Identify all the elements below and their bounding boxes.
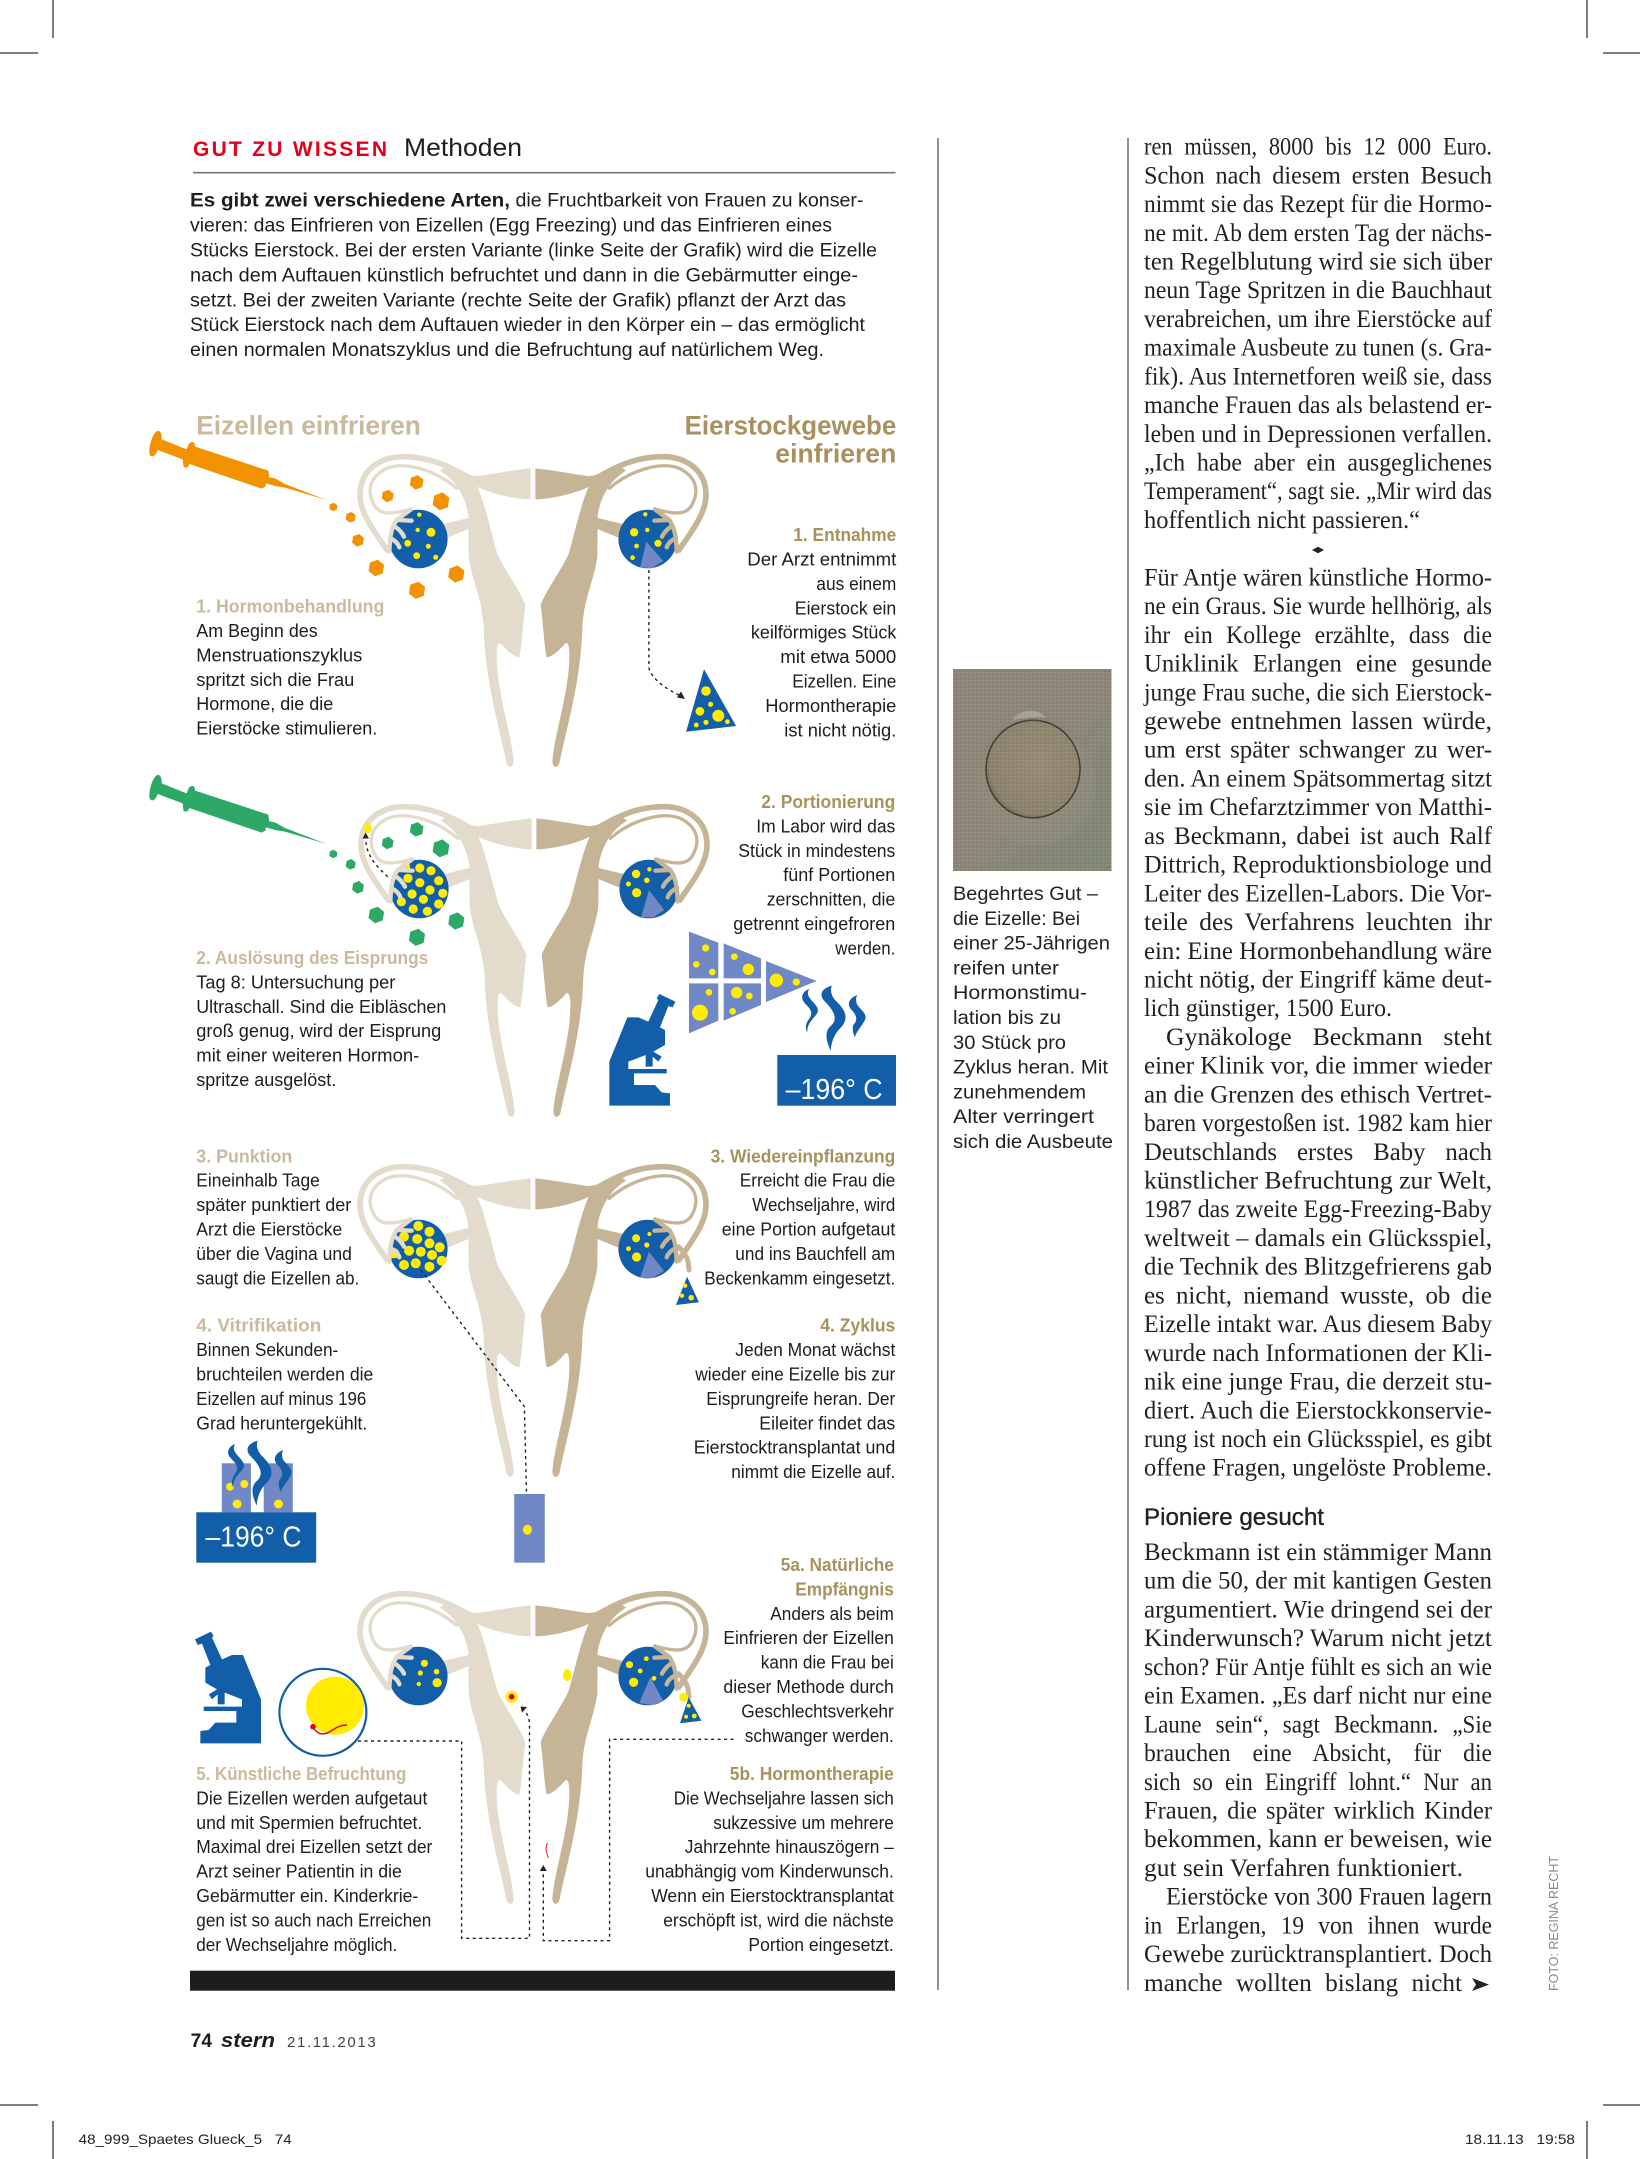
step text: 1. Hormonbehandlung: Hormone, die die xyxy=(196,694,333,714)
article column: third part: bekommen, kann er beweisen, wie xyxy=(1144,1826,1492,1853)
article column: second part: ein: Eine Hormonbehandlung wäre xyxy=(1144,938,1492,965)
step text: 2. Auslösung des Eisprungs: 2. Auslösung des Eisprungs xyxy=(196,948,428,968)
page footer: 74 xyxy=(191,2031,212,2052)
photo caption: 30 Stück pro xyxy=(953,1033,1066,1054)
vitrification straw xyxy=(514,1494,545,1563)
uterus left half xyxy=(360,457,531,767)
article column: second part: nicht nötig, der Eingriff käme deut- xyxy=(1144,966,1492,994)
article column: third part: manche wollten bislang nicht xyxy=(1144,1970,1462,1997)
step text: 2. Portionierung: getrennt eingefroren xyxy=(733,914,895,934)
intro text: setzt. Bei der zweiten Variante (rechte Seite der Grafik) pflanzt der Arzt das xyxy=(190,290,846,311)
article column: second part: die Technik des Blitzgefrierens gab xyxy=(1144,1254,1492,1281)
step text: 5b. Hormontherapie: 5b. Hormontherapie xyxy=(730,1764,894,1784)
step text: 3. Wiedereinpflanzung xyxy=(704,1146,895,1288)
dotted path: hormone therapy xyxy=(540,1739,734,1941)
article column: second part: gewebe entnehmen lassen würde, xyxy=(1144,708,1492,735)
article column: first part: Temperament“, sagt sie. „Mir wird das xyxy=(1144,478,1492,505)
step text: 1. Hormonbehandlung: Menstruationszyklus xyxy=(196,645,362,665)
step text: 2. Auslösung des Eisprungs: Tag 8: Untersuchung per xyxy=(196,972,395,992)
tissue portions cut into five xyxy=(689,932,817,1033)
step text: 5a. Natürliche Empfängnis xyxy=(723,1555,894,1746)
article column: second part: es nicht, niemand wusste, ob die xyxy=(1144,1282,1492,1309)
article column: third part: in Erlangen, 19 von ihnen wurde xyxy=(1144,1912,1492,1939)
step text: 3. Punktion: saugt die Eizellen ab. xyxy=(196,1268,359,1288)
article column: first part: manche Frauen das als belastend er- xyxy=(1144,392,1492,419)
step text: 4. Vitrifikation: 4. Vitrifikation xyxy=(196,1316,321,1336)
article column: first part xyxy=(1144,134,1493,534)
photo caption: Alter verringert xyxy=(953,1107,1095,1128)
step text: 3. Punktion: 3. Punktion xyxy=(196,1146,292,1166)
photo caption: die Eizelle: Bei xyxy=(953,909,1080,930)
step text: 3. Punktion xyxy=(196,1146,359,1288)
article column: first part: „Ich habe aber ein ausgeglichenes xyxy=(1144,450,1492,476)
step text: 5b. Hormontherapie: Die Wechseljahre lassen sich xyxy=(674,1788,894,1808)
uterus right half xyxy=(535,1594,706,1904)
magnified egg with sperm xyxy=(279,1669,366,1756)
intro text xyxy=(190,191,877,361)
column rules xyxy=(938,138,1128,1990)
step text: 1. Entnahme: Der Arzt entnimmt xyxy=(747,550,896,570)
uterus left half with puncture xyxy=(360,1167,531,1477)
step text: 5b. Hormontherapie xyxy=(645,1764,894,1955)
step text: 5b. Hormontherapie: sukzessive um mehrere xyxy=(713,1813,894,1833)
freezing icon left: –196° C xyxy=(206,1522,302,1554)
title: Methoden: Methoden xyxy=(404,134,522,162)
article column: first part: maximale Ausbeute zu tunen (s. Gra- xyxy=(1144,335,1492,362)
step text: 4. Vitrifikation: bruchteilen werden die xyxy=(196,1364,373,1384)
article column: second part: sie im Chefarztzimmer von Matthi- xyxy=(1144,794,1492,821)
step text: 2. Portionierung: fünf Portionen xyxy=(783,865,895,885)
article column: third part xyxy=(1144,1539,1493,1997)
step text: 5. Künstliche Befruchtung: und mit Spermien befruchtet. xyxy=(196,1813,422,1833)
step text: 1. Hormonbehandlung xyxy=(196,596,384,739)
photo caption: zunehmendem xyxy=(953,1082,1086,1103)
photo caption: sich die Ausbeute xyxy=(953,1132,1113,1153)
green hormone particles xyxy=(329,822,464,946)
step text: 5a. Natürliche Empfängnis: Anders als beim xyxy=(770,1604,894,1624)
step text: 4. Vitrifikation: Binnen Sekunden- xyxy=(196,1340,338,1360)
uterus left half xyxy=(360,1594,531,1904)
row 4 illustration xyxy=(195,1594,734,1941)
step text: 5a. Natürliche Empfängnis: Einfrieren der Eizellen xyxy=(723,1628,894,1648)
step text: 1. Entnahme: Eizellen. Eine xyxy=(792,672,896,692)
step text: 5. Künstliche Befruchtung xyxy=(196,1764,432,1955)
tissue wedge xyxy=(686,669,736,732)
step text: 4. Vitrifikation: Eizellen auf minus 196 xyxy=(196,1389,366,1409)
step text: 4. Zyklus: Eisprungreife heran. Der xyxy=(706,1389,895,1409)
step text: 1. Entnahme: keilförmiges Stück xyxy=(751,623,897,643)
step text: 4. Zyklus: wieder eine Eizelle bis zur xyxy=(694,1364,895,1384)
step text: 4. Zyklus xyxy=(694,1316,895,1482)
continuation arrow xyxy=(1472,1978,1489,1991)
step text: 2. Auslösung des Eisprungs: mit einer weiteren Hormon- xyxy=(196,1046,419,1066)
step text: 5b. Hormontherapie: Wenn ein Eierstocktransplantat xyxy=(651,1886,894,1906)
step text: 2. Auslösung des Eisprungs: groß genug, wird der Eisprung xyxy=(196,1021,441,1041)
uterus right half xyxy=(536,807,707,1117)
article column: second part: teile des Verfahrens leuchten ihr xyxy=(1144,909,1493,936)
step text: 3. Wiedereinpflanzung: Erreicht die Frau die xyxy=(740,1171,895,1191)
step text: 1. Entnahme: ist nicht nötig. xyxy=(784,720,896,740)
article column: second part: diert. Auch die Eierstockkonservie- xyxy=(1144,1397,1492,1424)
page footer: stern xyxy=(221,2030,275,2052)
step text: 2. Portionierung xyxy=(733,792,895,958)
article column: second part: Für Antje wären künstliche Hormo- xyxy=(1144,564,1492,591)
article column: first part: nimmt sie das Rezept für die Hormo- xyxy=(1144,191,1492,218)
step text: 4. Vitrifikation: Grad heruntergekühlt. xyxy=(196,1413,367,1433)
intro text: Es gibt zwei verschiedene Arten, xyxy=(190,191,510,212)
article column: third part: brauchen eine Absicht, für die xyxy=(1144,1740,1492,1767)
photo caption: Zyklus heran. Mit xyxy=(953,1058,1109,1079)
step text: 5b. Hormontherapie: unabhängig vom Kinderwunsch. xyxy=(645,1862,894,1882)
article column: third part: Eierstöcke von 300 Frauen lagern xyxy=(1166,1884,1492,1911)
article column: second part: Deutschlands erstes Baby nach xyxy=(1144,1139,1492,1166)
step text: 3. Wiedereinpflanzung: Wechseljahre, wird xyxy=(752,1195,895,1215)
step text: 2. Portionierung: Stück in mindestens xyxy=(738,841,895,861)
step text: 5b. Hormontherapie: Portion eingesetzt. xyxy=(748,1935,894,1955)
icon: microscope xyxy=(609,994,675,1106)
freezing icon left xyxy=(196,1441,316,1563)
photo caption: einer 25-Jährigen xyxy=(953,934,1110,955)
article column: second part: ihr ein Kollege erzählte, dass die xyxy=(1144,622,1492,649)
step text: 4. Zyklus: Eileiter findet das xyxy=(759,1413,895,1433)
icon: orange syringe xyxy=(149,431,327,500)
article column: first part: neun Tage Spritzen in die Bauchhaut xyxy=(1144,277,1492,304)
step text: 2. Portionierung: werden. xyxy=(834,938,895,958)
article column: third part: Beckmann ist ein stämmiger Mann xyxy=(1144,1539,1492,1566)
photo caption: lation bis zu xyxy=(953,1008,1061,1029)
article column: third part: ein Examen. „Es darf nicht nur eine xyxy=(1144,1683,1492,1710)
article column: second part: Uniklinik Erlangen eine gesunde xyxy=(1144,651,1492,678)
section header xyxy=(193,134,522,162)
step text: 3. Punktion: Eineinhalb Tage xyxy=(196,1171,320,1191)
black footer bar xyxy=(190,1971,895,1991)
article column: first part: ne mit. Ab dem ersten Tag der nächs- xyxy=(1144,220,1492,247)
step text: 2. Auslösung des Eisprungs: spritze ausgelöst. xyxy=(196,1070,336,1090)
photo caption: reifen unter xyxy=(953,958,1060,979)
heading: Eierstockgewebe einfrieren: einfrieren xyxy=(775,439,896,469)
step text: 1. Hormonbehandlung: 1. Hormonbehandlung xyxy=(196,596,384,616)
heading: Eierstockgewebe einfrieren xyxy=(685,410,896,469)
photo: egg cell xyxy=(953,669,1112,871)
article column: first part: verabreichen, um ihre Eierstöcke auf xyxy=(1144,306,1493,333)
article column: second part: nik eine junge Frau, die derzeit stu- xyxy=(1144,1369,1492,1396)
article column: third part: gut sein Verfahren funktioniert. xyxy=(1144,1855,1463,1882)
intro text: Stück Eierstock nach dem Auftauen wieder in den Körper ein – das ermöglicht xyxy=(190,315,866,336)
icon: microscope mirrored xyxy=(195,1632,261,1743)
step text: 5a. Natürliche Empfängnis: Empfängnis xyxy=(795,1579,894,1599)
article column: second part: den. An einem Spätsommertag sitzt xyxy=(1144,765,1492,792)
article column: second part: lich günstiger, 1500 Euro. xyxy=(1144,995,1392,1022)
step text: 5. Künstliche Befruchtung: 5. Künstliche Befruchtung xyxy=(196,1764,406,1784)
step text: 2. Auslösung des Eisprungs xyxy=(196,948,446,1090)
article column: second part: einer Klinik vor, die immer wieder xyxy=(1144,1053,1493,1080)
step text: 2. Portionierung: 2. Portionierung xyxy=(761,792,895,812)
eggs and sperm in tract xyxy=(506,1669,688,1858)
article column: second part xyxy=(1143,564,1493,1482)
section divider ornament xyxy=(1312,547,1324,553)
step text: 5b. Hormontherapie: erschöpft ist, wird die nächste xyxy=(663,1910,894,1930)
uterus right half xyxy=(535,457,706,767)
row 2 illustration xyxy=(149,775,896,1117)
step text: 1. Hormonbehandlung: spritzt sich die Frau xyxy=(196,670,354,690)
article column: second part: um erst später schwanger zu wer- xyxy=(1144,737,1492,764)
step text: 4. Vitrifikation xyxy=(196,1316,373,1433)
article column: second part: an die Grenzen des ethisch Vertret- xyxy=(1144,1081,1492,1108)
step text: 3. Punktion: später punktiert der xyxy=(196,1195,351,1215)
article column: second part: junge Frau suche, die sich Eierstock- xyxy=(1143,679,1492,706)
uterus right half with reimplanted tissue xyxy=(535,1167,706,1477)
photo caption: Begehrtes Gut – xyxy=(953,884,1098,905)
step text: 5b. Hormontherapie: Jahrzehnte hinauszögern – xyxy=(685,1837,894,1857)
step text: 3. Punktion: Arzt die Eierstöcke xyxy=(196,1220,342,1240)
photo caption xyxy=(953,884,1113,1153)
article column: second part: Gynäkologe Beckmann steht xyxy=(1166,1024,1492,1051)
icon: green syringe xyxy=(149,775,327,844)
step text: 2. Portionierung: Im Labor wird das xyxy=(756,816,895,836)
dotted arrow: ovulation xyxy=(362,832,388,877)
step text: 3. Wiedereinpflanzung: Beckenkamm eingesetzt. xyxy=(704,1268,895,1288)
row 1 illustration xyxy=(149,431,736,767)
article column: second part: Leiter des Eizellen-Labors. Die Vor- xyxy=(1144,880,1492,907)
article column: third part: schon? Für Antje fühlt es sich an wie xyxy=(1144,1654,1492,1681)
article column: third part: sich so ein Eingriff lohnt.“ Nur an xyxy=(1144,1769,1492,1796)
orange hormone particles xyxy=(329,475,464,599)
intro text: nach dem Auftauen künstlich befruchtet und dann in die Gebärmutter einge- xyxy=(190,265,858,286)
article column: third part: Frauen, die später wirklich Kinder xyxy=(1144,1798,1493,1824)
page footer: 21.11.2013 xyxy=(287,2034,376,2051)
heading: Eierstockgewebe einfrieren: Eierstockgewebe xyxy=(685,410,896,440)
article column: second part: Dittrich, Reproduktionsbiologe und xyxy=(1144,852,1492,879)
article column: first part: ren müssen, 8000 bis 12 000 Euro. xyxy=(1144,134,1492,161)
article column: second part: Eizelle intakt war. Aus diesem Baby xyxy=(1144,1311,1492,1338)
photo credit: FOTO: REGINA RECHT xyxy=(1546,1856,1561,1991)
step text: 5a. Natürliche Empfängnis: kann die Frau bei xyxy=(761,1653,894,1673)
step text: 3. Wiedereinpflanzung: und ins Bauchfell am xyxy=(735,1244,895,1264)
step text: 5a. Natürliche Empfängnis: dieser Methode durch xyxy=(723,1677,894,1697)
dotted path: artificial fertilisation xyxy=(358,1706,530,1938)
article column: third part: argumentiert. Wie dringend sei der xyxy=(1144,1596,1493,1623)
step text: 2. Portionierung: zerschnitten, die xyxy=(767,890,895,910)
step text: 1. Entnahme: 1. Entnahme xyxy=(793,525,896,545)
step text: 5. Künstliche Befruchtung: gen ist so auch nach Erreichen xyxy=(196,1910,431,1930)
step text: 5a. Natürliche Empfängnis: Geschlechtsverkehr xyxy=(741,1701,894,1721)
step text: 4. Zyklus: nimmt die Eizelle auf. xyxy=(731,1462,895,1482)
article column: second part: baren vorgestoßen ist. 1982 kam hier xyxy=(1144,1110,1493,1137)
step text: 5. Künstliche Befruchtung: Gebärmutter ein. Kinderkrie- xyxy=(196,1886,418,1906)
step text: 3. Wiedereinpflanzung: eine Portion aufgetaut xyxy=(722,1220,895,1240)
article column: second part: weltweit – damals ein Glücksspiel, xyxy=(1144,1225,1492,1252)
article column: second part: offene Fragen, ungelöste Probleme. xyxy=(1144,1455,1492,1482)
article column: second part: ne ein Graus. Sie wurde hellhörig, als xyxy=(1144,593,1492,620)
article column: third part: Laune sein“, sagt Beckmann. „Sie xyxy=(1144,1711,1492,1738)
step text: 4. Zyklus: 4. Zyklus xyxy=(820,1316,895,1336)
subheading: Pioniere gesucht: Pioniere gesucht xyxy=(1144,1504,1324,1531)
intro text: Stücks Eierstock. Bei der ersten Variante (linke Seite der Grafik) wird die Eizelle xyxy=(190,240,877,262)
article column: second part: wurde nach Informationen der Kli- xyxy=(1144,1340,1492,1367)
freezer box -196 C: –196° C xyxy=(786,1074,883,1106)
step text: 4. Zyklus: Jeden Monat wächst xyxy=(735,1340,895,1360)
step text: 5. Künstliche Befruchtung: Die Eizellen werden aufgetaut xyxy=(196,1788,427,1808)
step text: 1. Hormonbehandlung: Eierstöcke stimulieren. xyxy=(196,719,377,739)
step text: 3. Punktion: über die Vagina und xyxy=(196,1244,352,1264)
article column: second part: künstlicher Befruchtung zur Welt, xyxy=(1144,1168,1492,1194)
step text: 3. Wiedereinpflanzung: 3. Wiedereinpflanzung xyxy=(711,1146,895,1166)
step text: 4. Zyklus: Eierstocktransplantat und xyxy=(694,1438,895,1458)
step text: 5. Künstliche Befruchtung: der Wechseljahre möglich. xyxy=(196,1935,397,1955)
step text: 5. Künstliche Befruchtung: Maximal drei Eizellen setzt der xyxy=(196,1837,432,1857)
step text: 1. Entnahme: mit etwa 5000 xyxy=(780,647,896,667)
step text: 1. Entnahme xyxy=(747,525,897,740)
kicker: Gut zu wissen: GUT ZU WISSEN xyxy=(193,138,387,161)
small tissue wedge at pelvic crest xyxy=(676,1277,699,1305)
step text: 1. Entnahme: Hormontherapie xyxy=(765,696,896,716)
article column: first part: hoffentlich nicht passieren.“ xyxy=(1144,507,1420,534)
article column: second part: rung ist noch ein Glücksspiel, es gibt xyxy=(1144,1426,1492,1453)
icon: cold vapour xyxy=(802,986,866,1051)
intro text: vieren: das Einfrieren von Eizellen (Egg Freezing) und das Einfrieren eines xyxy=(190,216,832,237)
article column: third part: um die 50, der mit kantigen Gesten xyxy=(1144,1568,1492,1595)
dotted arrow to straw xyxy=(421,1270,530,1520)
dotted arrow to tissue wedge xyxy=(649,570,685,699)
step text: 1. Entnahme: aus einem xyxy=(816,574,896,594)
step text: 5. Künstliche Befruchtung: Arzt seiner Patientin in die xyxy=(196,1862,402,1882)
heading: Eizellen einfrieren: Eizellen einfrieren xyxy=(196,410,421,440)
intro text: die Fruchtbarkeit von Frauen zu konser- xyxy=(516,191,864,212)
step text: 1. Entnahme: Eierstock ein xyxy=(795,598,896,618)
article column: first part: Schon nach diesem ersten Besuch xyxy=(1144,162,1492,189)
article column: third part: Kinderwunsch? Warum nicht jetzt xyxy=(1144,1625,1492,1652)
printer slug left: 48_999_Spaetes Glueck_5 74 xyxy=(79,2131,292,2147)
page footer xyxy=(191,2030,376,2052)
article column: first part: ten Regelblutung wird sie sich über xyxy=(1144,248,1493,276)
photo caption: Hormonstimu- xyxy=(953,983,1087,1004)
uterus left half with ripe follicles xyxy=(361,807,532,1117)
step text: 2. Auslösung des Eisprungs: Ultraschall. Sind die Eibläschen xyxy=(196,997,446,1017)
printer slug right: 18.11.13 19:58 xyxy=(1465,2131,1575,2147)
article column: third part: Gewebe zurücktransplantiert. Doch xyxy=(1144,1941,1492,1968)
step text: 5a. Natürliche Empfängnis: schwanger werden. xyxy=(745,1726,894,1746)
article column: second part: as Beckmann, dabei ist auch Ralf xyxy=(1144,823,1493,850)
freezer box -196 C xyxy=(777,1055,896,1106)
intro text: einen normalen Monatszyklus und die Befruchtung auf natürlichem Weg. xyxy=(190,340,824,361)
step text: 1. Hormonbehandlung: Am Beginn des xyxy=(196,621,318,641)
row 3 illustration xyxy=(196,1167,706,1563)
article column: first part: leben und in Depressionen verfallen. xyxy=(1144,421,1492,448)
article column: first part: fik). Aus Internetforen weiß sie, dass xyxy=(1144,363,1492,390)
article column: second part: 1987 das zweite Egg-Freezing-Baby xyxy=(1144,1196,1492,1223)
step text: 5a. Natürliche Empfängnis: 5a. Natürliche xyxy=(781,1555,894,1575)
small tissue wedge xyxy=(680,1697,701,1723)
